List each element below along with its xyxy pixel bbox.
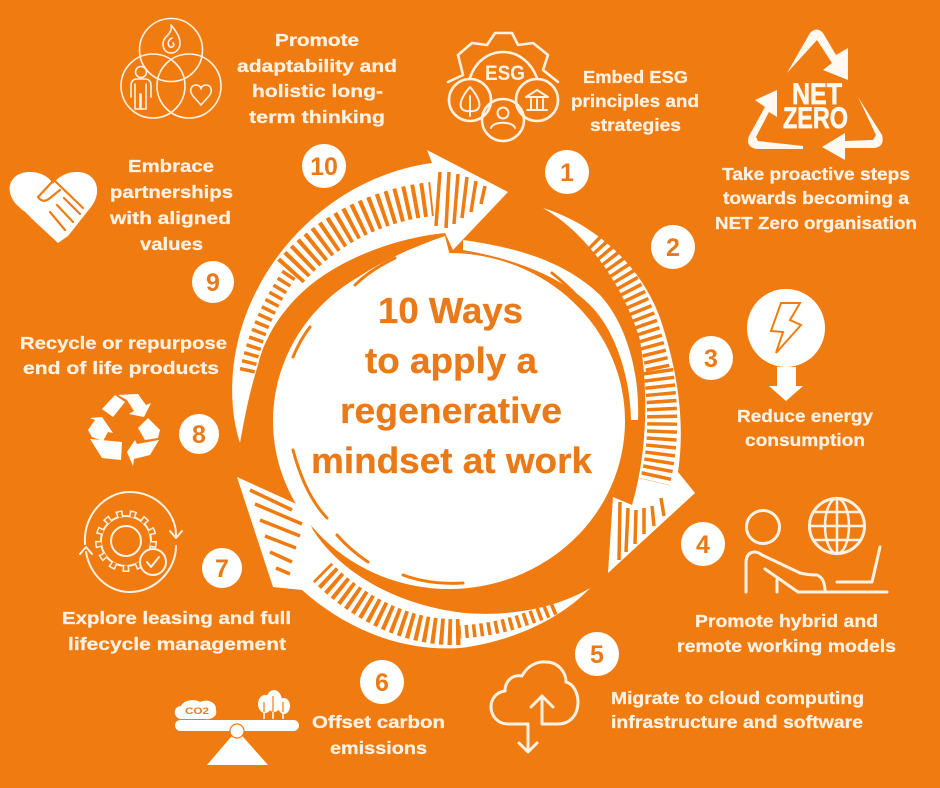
- text: step 7: Explore leasing and full: [62, 608, 291, 628]
- number 7: 7: [215, 555, 229, 583]
- number 10: [302, 144, 346, 188]
- text: step 3: consumption: [745, 430, 865, 450]
- icon: remote worker with globe: [746, 498, 887, 592]
- text: step 4: Promote hybrid and: [695, 611, 878, 631]
- title: mindset at work: [311, 440, 593, 481]
- title: regenerative: [340, 390, 562, 431]
- number 3: [689, 336, 733, 380]
- title: to apply a: [365, 340, 538, 381]
- icon: ESG gear: [448, 33, 558, 141]
- text: step 10: term thinking: [249, 107, 385, 127]
- icon: net zero: [748, 30, 883, 160]
- text: step 9: values: [140, 234, 203, 254]
- text: step 7: [62, 608, 291, 654]
- icon: net zero: ZERO: [783, 102, 848, 135]
- number 9: [192, 261, 234, 303]
- text: step 6: Offset carbon: [312, 712, 445, 732]
- text: step 9: [109, 156, 233, 254]
- text: step 1: [571, 67, 699, 135]
- icon: carbon offset seesaw: [175, 690, 299, 765]
- text: step 10: [237, 30, 397, 127]
- text: step 8: [20, 333, 227, 378]
- text: step 1: principles and: [571, 91, 699, 111]
- number 6: [360, 660, 404, 704]
- number 8: 8: [192, 421, 206, 449]
- text: step 8: end of life products: [23, 358, 219, 378]
- icon: net zero: NET: [792, 78, 842, 111]
- text: step 8: Recycle or repurpose: [20, 333, 227, 353]
- number 2: [651, 225, 695, 269]
- icon: cloud upload: [491, 662, 578, 752]
- arrow: top sweep towards step 1: [232, 150, 508, 443]
- text: step 5: [611, 688, 864, 732]
- number 6: 6: [375, 669, 389, 697]
- text: step 2: towards becoming a: [723, 188, 909, 208]
- text: step 1: strategies: [590, 115, 681, 135]
- icon: handshake heart: [10, 172, 97, 243]
- icon: gear lifecycle: [80, 492, 182, 592]
- number 10: 10: [310, 153, 338, 181]
- number 4: 4: [696, 531, 710, 559]
- central circle: [273, 236, 638, 589]
- arrow: right sweep towards step 4: [543, 208, 695, 573]
- number 8: [179, 414, 219, 454]
- text: step 1: Embed ESG: [583, 67, 688, 87]
- number 2: 2: [666, 234, 680, 262]
- text: step 2: NET Zero organisation: [715, 213, 917, 233]
- text: step 3: [737, 406, 873, 450]
- number 3: 3: [704, 345, 718, 373]
- icon: recycle: [88, 394, 160, 466]
- text: step 10: Promote: [275, 30, 359, 50]
- number 7: [202, 548, 242, 588]
- text: step 5: Migrate to cloud computing: [611, 688, 864, 708]
- text: step 6: emissions: [330, 738, 427, 758]
- text: step 10: adaptability and: [237, 56, 397, 76]
- text: step 4: [677, 611, 896, 656]
- text: step 9: with aligned: [109, 208, 231, 228]
- number 5: [575, 632, 619, 676]
- number 9: 9: [206, 269, 220, 297]
- number 4: [681, 522, 725, 566]
- icon: carbon offset seesaw: CO2: [185, 706, 209, 717]
- text: step 6: [312, 712, 445, 758]
- text: step 7: lifecycle management: [68, 634, 286, 654]
- text: step 4: remote working models: [677, 636, 896, 656]
- title: [311, 290, 593, 481]
- number 5: 5: [590, 641, 604, 669]
- text: step 2: [715, 164, 917, 233]
- text: step 10: holistic long-: [252, 81, 383, 101]
- icon: venn diagram: [121, 18, 221, 118]
- text: step 2: Take proactive steps: [722, 164, 910, 184]
- text: step 9: Embrace: [128, 156, 214, 176]
- title: 10 Ways: [378, 290, 523, 331]
- icon: energy bolt with down arrow: [747, 289, 825, 401]
- text: step 9: partnerships: [110, 182, 233, 202]
- text: step 3: Reduce energy: [737, 406, 873, 426]
- icon: ESG gear: ESG: [485, 62, 525, 85]
- arrow: bottom sweep towards step 7: [237, 477, 590, 648]
- number 1: 1: [560, 159, 574, 187]
- number 1: [545, 150, 589, 194]
- text: step 5: infrastructure and software: [611, 712, 863, 732]
